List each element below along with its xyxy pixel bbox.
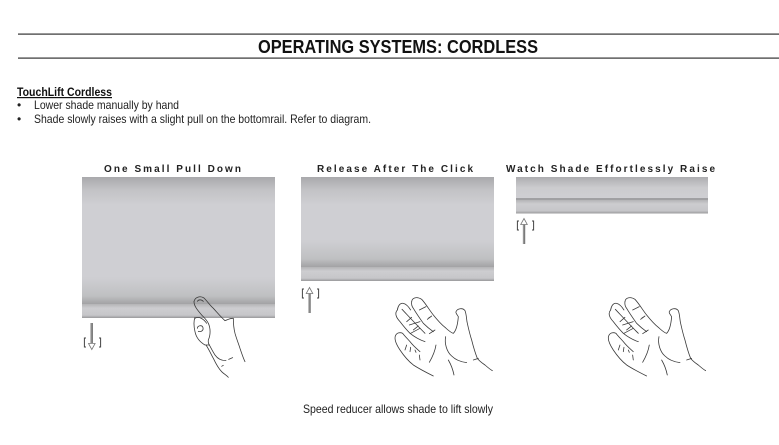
arrow: down [84,323,101,350]
bullet list: • [17,112,21,126]
section heading: TouchLift Cordless [17,85,112,99]
panel: one small pull down [82,164,275,377]
panel: watch shade effortlessly raise [506,164,715,376]
icon: hand pulling shade down [194,297,245,377]
step heading 3: Watch Shade Effortlessly Raise [506,164,715,175]
step heading 2: Release After The Click [317,164,473,175]
bullet list: Lower shade manually by hand [34,98,179,112]
bullet list: Shade slowly raises with a slight pull on the bottomrail. Refer to diagram. [34,112,371,126]
icon: open hand [395,298,492,376]
bullet list: • [17,98,21,112]
title: OPERATING SYSTEMS: CORDLESS [258,37,538,57]
caption: Speed reducer allows shade to lift slowly [303,402,493,416]
step heading 1: One Small Pull Down [104,164,241,175]
arrow: up [302,288,319,313]
bullet list [17,98,371,126]
shade 3 [516,177,708,214]
shade 2 [301,177,494,281]
shade 1 [82,177,275,318]
panel: release after the click [301,164,494,376]
icon: open hand [608,298,706,376]
arrow: up [517,218,534,244]
